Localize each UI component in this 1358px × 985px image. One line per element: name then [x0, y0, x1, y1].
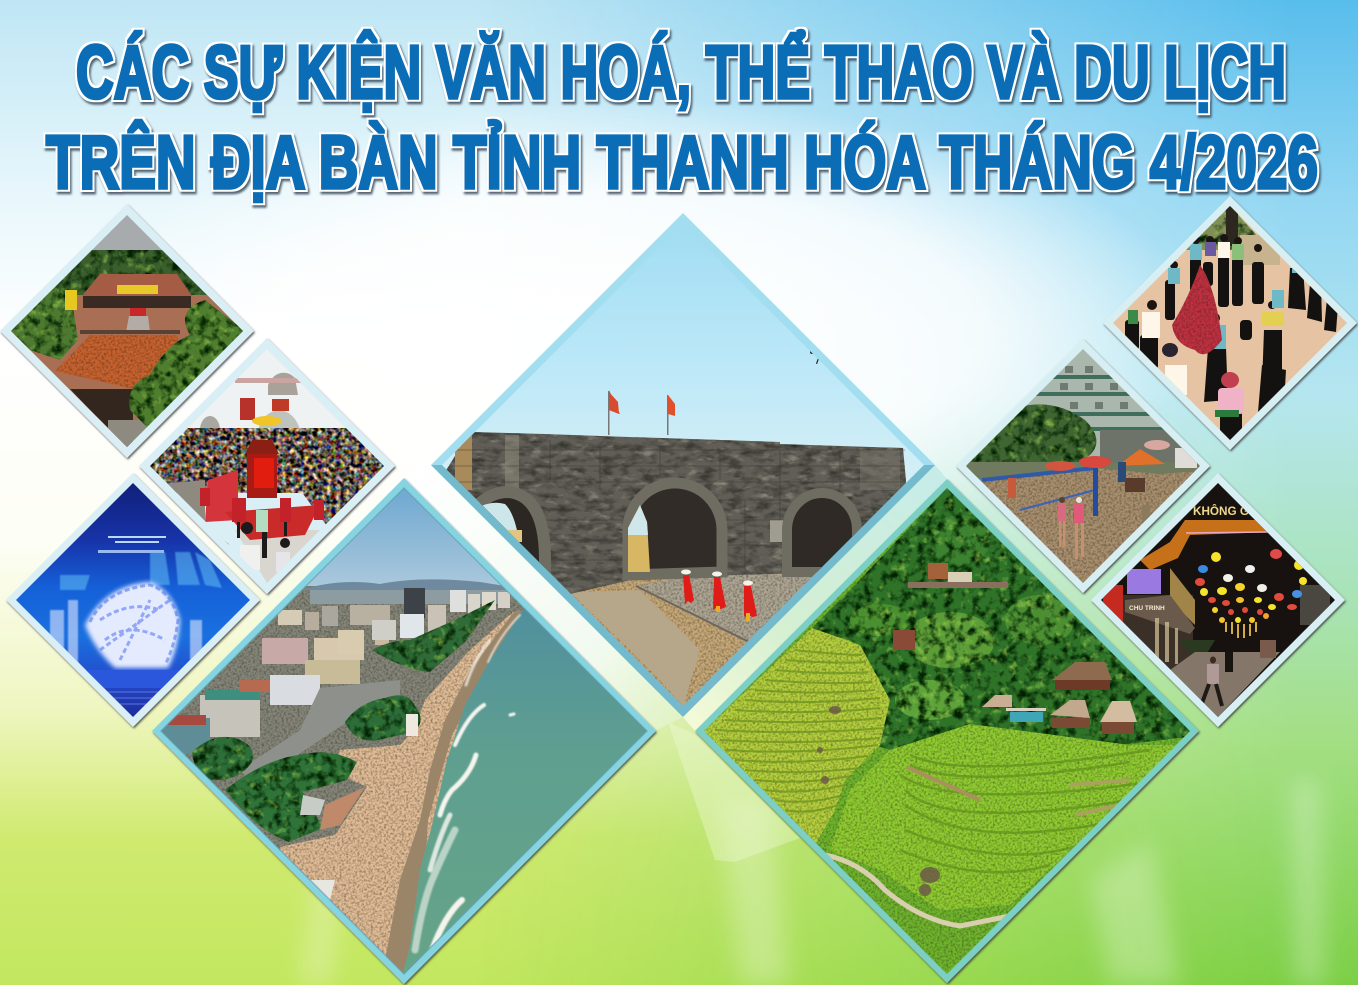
rocks [817, 706, 940, 896]
photo panel: stage performance [6, 473, 260, 727]
photo panel: festival procession [139, 338, 395, 594]
photo panel: beach volleyball [956, 339, 1210, 593]
arches [476, 478, 862, 580]
photo panel: temple [0, 204, 260, 458]
bird specks [810, 350, 819, 364]
road [825, 855, 1015, 926]
flags [608, 390, 675, 435]
city [150, 579, 550, 850]
thatched resort houses [893, 563, 1137, 734]
dancers ring [1125, 255, 1338, 440]
photo panel: lantern street at night: CHU TRINH [1129, 605, 1165, 612]
sign text: KHÔNG G [1193, 505, 1249, 518]
translucent lower frame [431, 465, 935, 717]
three women in red ao dai [681, 570, 757, 621]
left terraces [704, 628, 890, 845]
ground [537, 560, 829, 706]
waves [415, 615, 520, 950]
lanterns [1195, 549, 1307, 638]
right terraces [830, 724, 1180, 910]
photo panel: Ho citadel gate [430, 213, 940, 720]
red decorated tree [1172, 265, 1222, 354]
photo panel: Sam Son beach aerial [150, 478, 660, 985]
trees [192, 695, 421, 842]
sea [403, 608, 647, 974]
wall [440, 432, 907, 594]
sand [280, 610, 523, 980]
forest [810, 488, 1195, 750]
pale band between citadel and rice terraces [683, 465, 947, 731]
photo panel: Thai ethnic dancers [1103, 196, 1357, 450]
white band between citadel and beach [404, 465, 683, 731]
photo panel: lantern street at night [1091, 473, 1345, 727]
photo panel: rice terraces and resort [695, 479, 1200, 983]
walking people [1201, 652, 1233, 706]
title [46, 30, 1318, 204]
